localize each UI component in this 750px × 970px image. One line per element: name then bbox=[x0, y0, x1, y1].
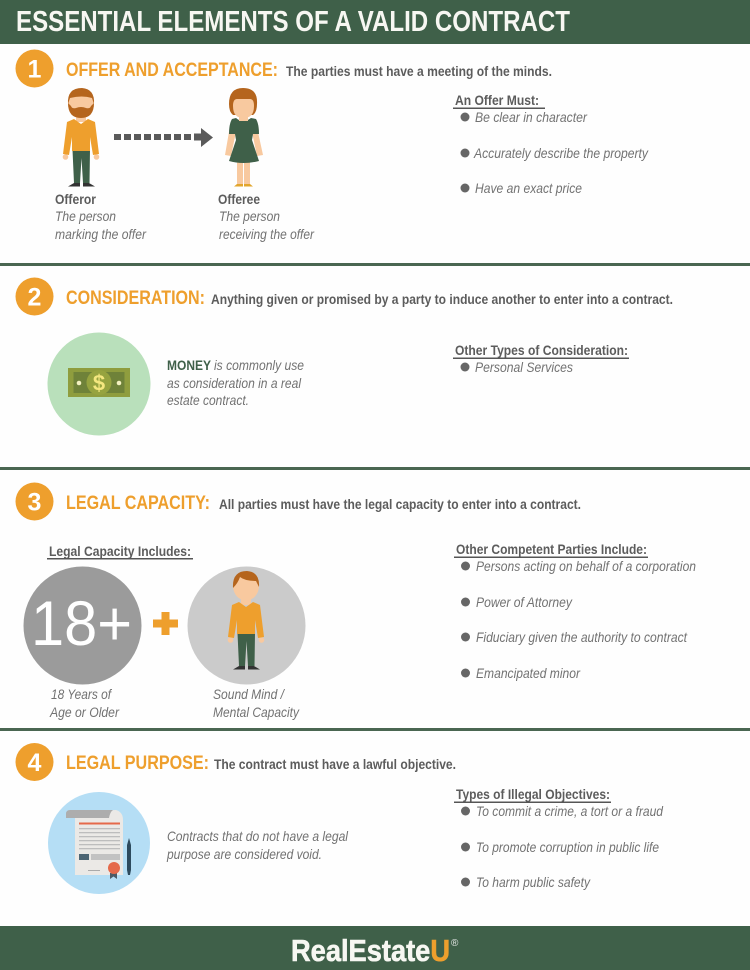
heading: legal capacity: LEGAL CAPACITY: bbox=[66, 492, 210, 514]
list: types of illegal objectives: To commit a crime, a tort or a fraud bbox=[476, 803, 664, 819]
caption: sound mind bbox=[213, 686, 300, 720]
heading: offer and acceptance: OFFER AND ACCEPTANCE: bbox=[66, 59, 278, 81]
list: an offer must: Be clear in character bbox=[475, 109, 588, 125]
arrow: offer direction bbox=[114, 128, 213, 147]
description: legal capacity: All parties must have the legal capacity to enter into a contract. bbox=[219, 496, 581, 512]
text: void contracts: purpose are considered void. bbox=[166, 846, 322, 862]
list: types of illegal objectives: To harm public safety bbox=[476, 874, 591, 890]
title banner bbox=[0, 0, 750, 44]
list: types of illegal objectives: To promote corruption in public life bbox=[476, 839, 659, 855]
description: legal purpose: The contract must have a lawful objective. bbox=[214, 756, 456, 772]
number badge 3 bbox=[16, 482, 54, 520]
text: money: as consideration in a real bbox=[167, 375, 302, 391]
list: other competent parties: Power of Attorney bbox=[476, 594, 573, 610]
icon: contract document bbox=[48, 792, 150, 894]
icon: sound mind person bbox=[188, 566, 306, 684]
list: other competent parties bbox=[454, 541, 696, 681]
icon: plus sign bbox=[153, 612, 178, 635]
description: offer and acceptance: The parties must have a meeting of the minds. bbox=[286, 63, 552, 79]
number badge 4: 4 bbox=[28, 749, 42, 777]
number badge 2: 2 bbox=[28, 284, 41, 312]
number badge 2 bbox=[16, 278, 54, 316]
text: money bbox=[167, 357, 304, 408]
list: an offer must: Have an exact price bbox=[475, 180, 582, 196]
icon: money: $ bbox=[93, 370, 105, 396]
list: an offer must: Accurately describe the property bbox=[473, 145, 649, 161]
list: other types of consideration: Personal Services bbox=[475, 359, 573, 375]
panel: offer and acceptance bbox=[16, 50, 649, 242]
subheading: legal capacity includes: Legal Capacity Includes: bbox=[49, 543, 191, 559]
icon: money bbox=[48, 332, 150, 436]
text: offeree description bbox=[219, 208, 315, 242]
panel: consideration bbox=[16, 278, 673, 436]
icon: offeror man bbox=[63, 88, 99, 186]
number badge 1 bbox=[16, 50, 54, 88]
icon: 18+ circle bbox=[24, 566, 142, 684]
heading: legal purpose: LEGAL PURPOSE: bbox=[66, 752, 209, 774]
caption: 18 years: 18 Years of bbox=[51, 686, 113, 702]
list: other competent parties: Persons acting on behalf of a corporation bbox=[476, 558, 696, 574]
panel: legal capacity bbox=[16, 482, 696, 720]
text: void contracts: Contracts that do not have a legal bbox=[167, 828, 349, 844]
list: other competent parties: Other Competent Parties Include: bbox=[456, 541, 647, 557]
caption: sound mind: Mental Capacity bbox=[213, 704, 300, 720]
caption: 18 years: Age or Older bbox=[49, 704, 120, 720]
title banner: ESSENTIAL ELEMENTS OF A VALID CONTRACT bbox=[16, 6, 570, 38]
label: offeror: Offeror bbox=[55, 191, 96, 207]
list: other types of consideration bbox=[453, 342, 629, 375]
footer with logo bbox=[0, 926, 750, 970]
text: offeror description: The person bbox=[55, 208, 116, 224]
number badge 4 bbox=[16, 743, 54, 781]
footer with logo: ® bbox=[451, 938, 459, 949]
list: other types of consideration: Other Types of Consideration: bbox=[455, 342, 628, 358]
icon: 18+ circle: 18+ bbox=[31, 589, 132, 659]
text: offeror description bbox=[55, 208, 147, 242]
description: consideration: Anything given or promised by a party to induce another to enter into a contract. bbox=[211, 291, 673, 307]
list: an offer must bbox=[453, 92, 649, 196]
icon: offeree woman bbox=[225, 88, 263, 186]
number badge 1: 1 bbox=[28, 56, 42, 84]
list: other competent parties: Emancipated minor bbox=[476, 665, 581, 681]
text: offeree description: The person bbox=[219, 208, 280, 224]
list: types of illegal objectives bbox=[454, 786, 664, 890]
text: offeree description: receiving the offer bbox=[219, 226, 315, 242]
text: offeror description: marking the offer bbox=[55, 226, 147, 242]
list: other competent parties: Fiduciary given the authority to contract bbox=[476, 629, 688, 645]
text: money: is commonly use bbox=[214, 357, 304, 373]
panel: legal purpose bbox=[16, 743, 664, 894]
number badge 3: 3 bbox=[28, 488, 41, 516]
text: money: estate contract. bbox=[167, 392, 249, 408]
label: offeree: Offeree bbox=[218, 191, 260, 207]
heading: consideration: CONSIDERATION: bbox=[66, 287, 205, 309]
list: types of illegal objectives: Types of Illegal Objectives: bbox=[456, 786, 610, 802]
text: void contracts bbox=[166, 828, 349, 862]
text: money: MONEY bbox=[167, 357, 212, 373]
caption: sound mind: Sound Mind / bbox=[213, 686, 286, 702]
footer with logo: RealEstateU bbox=[291, 933, 450, 968]
list: an offer must: An Offer Must: bbox=[455, 92, 539, 108]
caption: 18 years bbox=[49, 686, 120, 720]
